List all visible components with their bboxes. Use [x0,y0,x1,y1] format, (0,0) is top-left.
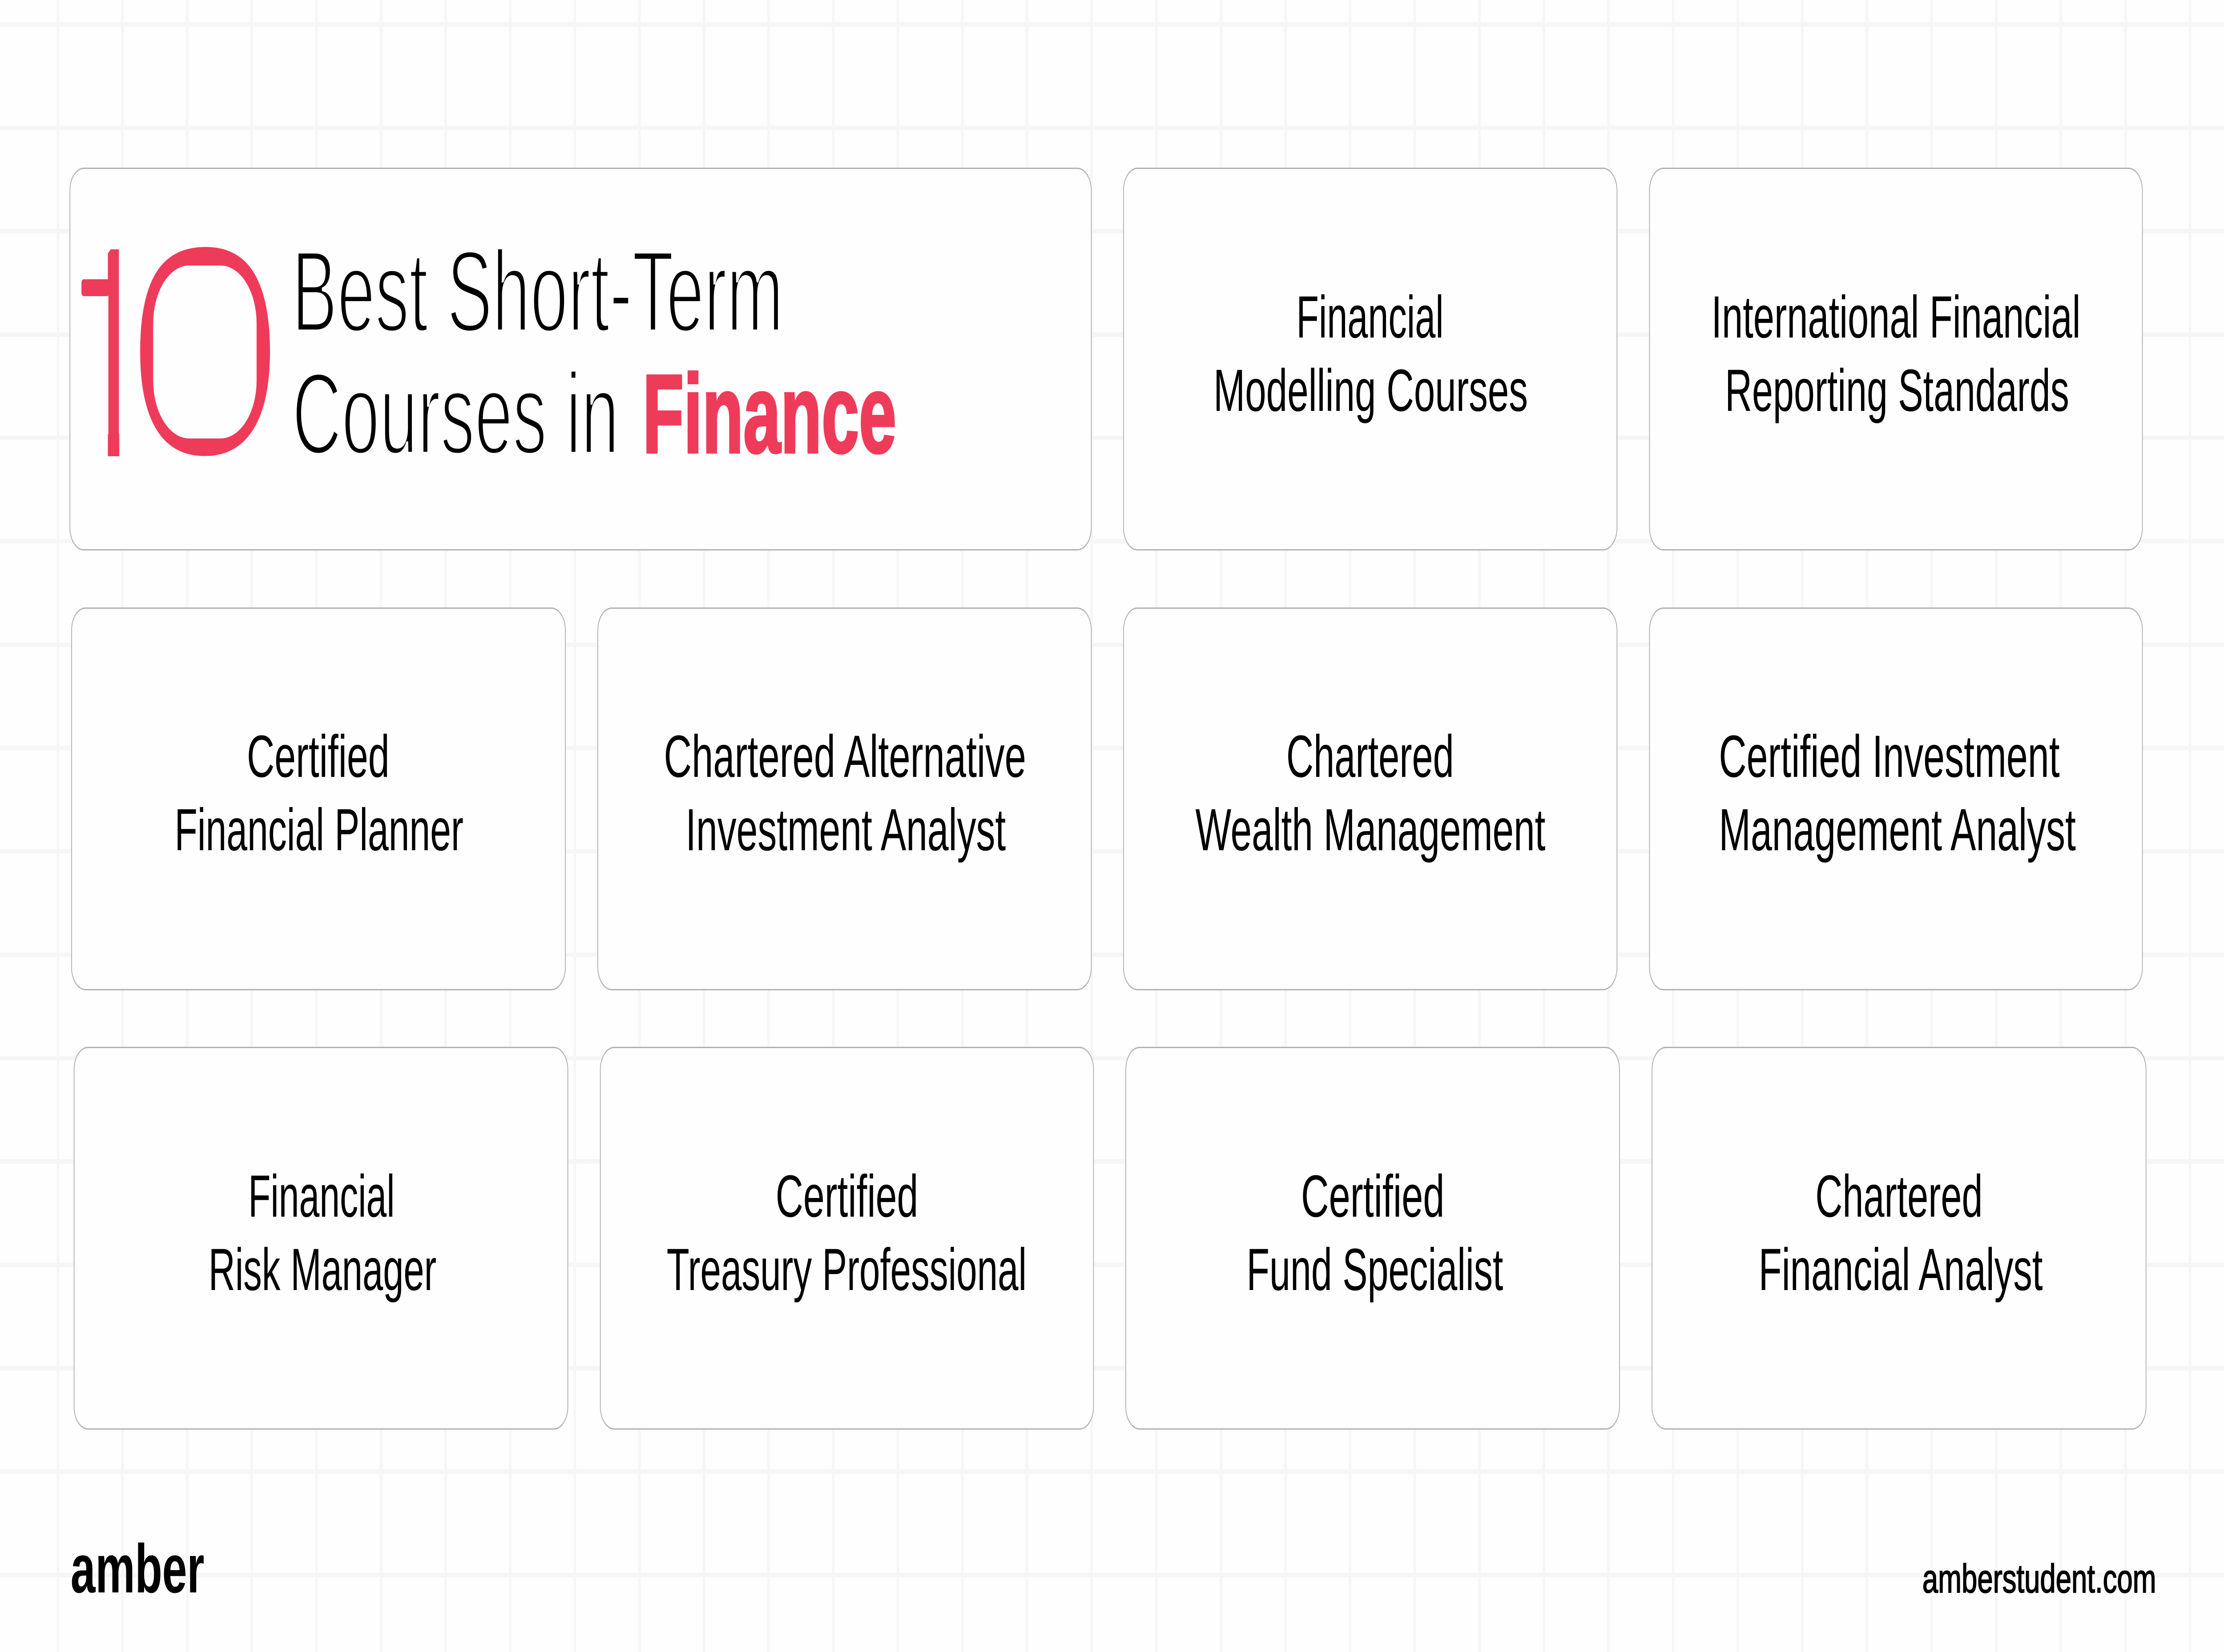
card: Certified Fund Specialist: Certified [1301,1163,1445,1230]
card: Financial Modelling Courses [1124,168,1617,550]
card: Certified Fund Specialist [1126,1048,1620,1429]
website url: amberstudent.com [1922,1556,2156,1601]
card: Certified Investment Management Analyst: Certified Investment [1719,723,2060,790]
card: Certified Investment Management Analyst: Management Analyst [1719,796,2076,863]
card: Chartered Wealth Management: Wealth Management [1196,796,1545,863]
card: Certified Treasury Professional: Certified [776,1163,918,1230]
card: Chartered Financial Analyst [1652,1048,2146,1429]
card: Certified Financial Planner [72,608,565,990]
card: Financial Modelling Courses: Financial [1296,284,1444,350]
panel: title card [70,121,1091,550]
card: Chartered Wealth Management: Chartered [1286,723,1454,790]
title text: Finance [643,352,896,476]
card: Certified Treasury Professional [600,1048,1093,1429]
card: Chartered Financial Analyst: Chartered [1815,1163,1983,1230]
title text: Best Short-Term [292,227,783,356]
big red number 10: 1 [79,121,143,540]
card: Certified Financial Planner: Certified [247,723,390,790]
title text: Courses in [292,349,619,478]
big red number 10 [75,121,281,540]
card: Chartered Alternative Investment Analyst: Chartered Alternative [664,723,1026,790]
card: Certified Fund Specialist: Fund Specialist [1246,1236,1503,1303]
card: Chartered Alternative Investment Analyst [598,608,1091,990]
card: Financial Risk Manager: Financial [248,1163,395,1230]
card: Certified Treasury Professional: Treasury Professional [667,1236,1027,1303]
card: Financial Modelling Courses: Modelling Courses [1213,357,1528,424]
card: Chartered Wealth Management [1124,608,1617,990]
big red number 10: 0 [129,186,281,516]
title text [292,227,896,478]
card: Financial Risk Manager: Risk Manager [209,1236,436,1303]
card: Certified Financial Planner: Financial Planner [174,796,463,863]
card: International Financial Reporting Standards [1649,168,2143,550]
card: International Financial Reporting Standards: International Financial [1712,284,2081,350]
card: Financial Risk Manager [74,1048,568,1429]
card: Chartered Financial Analyst: Financial Analyst [1759,1236,2043,1303]
card: International Financial Reporting Standards: Reporting Standards [1725,357,2069,424]
card: Chartered Alternative Investment Analyst: Investment Analyst [685,796,1006,863]
logo: amber: amber [71,1531,204,1608]
card: Certified Investment Management Analyst [1649,608,2143,990]
